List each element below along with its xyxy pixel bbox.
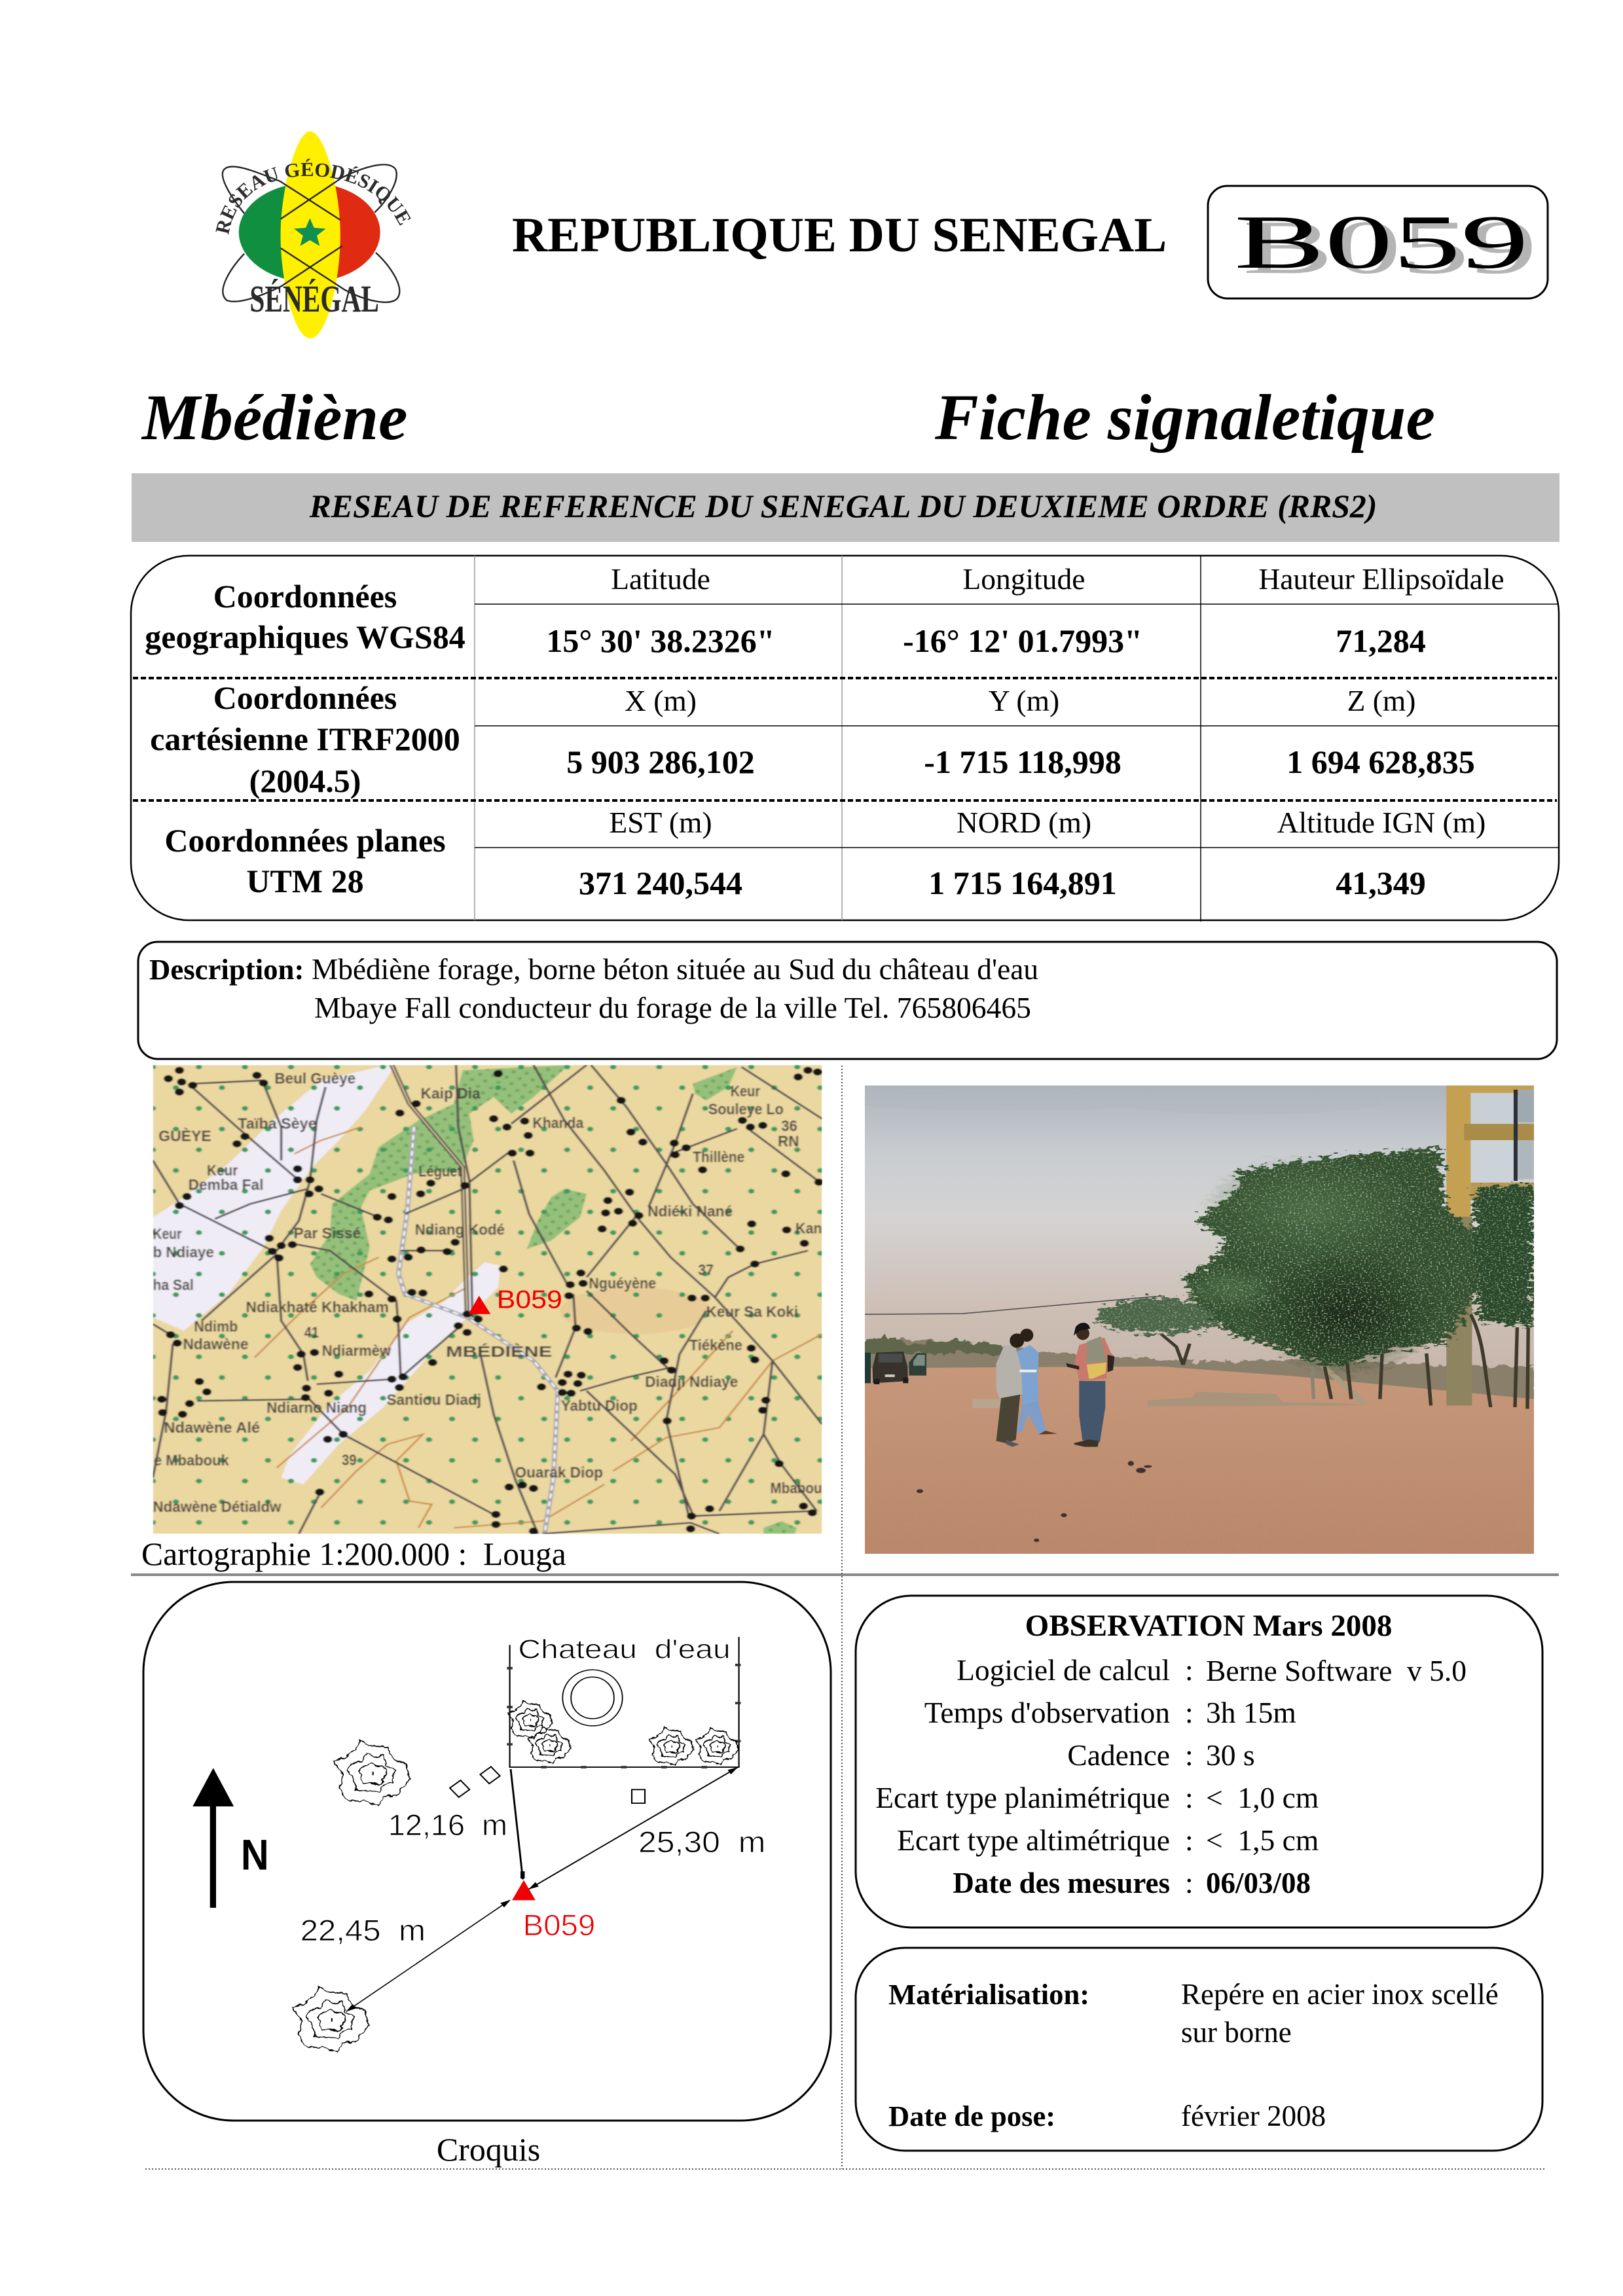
map village dots (162, 1070, 819, 1531)
logo: reseau geodesique du senegal (211, 132, 416, 338)
measurement arrowheads (346, 1767, 738, 2011)
measurement lines (346, 1767, 738, 2011)
person: orange vest (1066, 1323, 1114, 1447)
observation colons: : (1185, 1866, 1194, 1899)
water tower enclosure (507, 1635, 740, 1767)
row: geographic: Hauteur Ellipsoïdale (1258, 562, 1504, 596)
photo: site view (838, 1085, 1534, 1558)
map place names: Ndiang Kodé (415, 1221, 505, 1238)
observation labels (875, 1653, 1170, 1899)
row: geographic: geographiques WGS84 (145, 619, 465, 655)
observation values: 3h 15m (1206, 1696, 1296, 1729)
table frame (131, 556, 1559, 920)
north arrow: N (241, 1831, 269, 1879)
panel: description: Description: (149, 953, 304, 986)
map green patches (310, 1065, 797, 1534)
icon: tree enclosure 4 (696, 1727, 739, 1765)
photo people and vehicle (865, 1323, 1152, 1542)
map place names: Khanda (533, 1114, 584, 1132)
person: blue robe (1017, 1329, 1057, 1435)
row: cartesian: 1 694 628,835 (1286, 744, 1475, 780)
map contour lines (255, 1127, 822, 1528)
map place names: 37 (698, 1261, 714, 1278)
map place names: Thillène (693, 1148, 744, 1166)
row: cartesian: Y (m) (989, 684, 1059, 717)
sketch drawing (192, 1635, 765, 2053)
observation values: Berne Software v 5.0 (1206, 1654, 1467, 1687)
map place names: RN (778, 1132, 799, 1150)
panel: materialisation: Matérialisation: (888, 1978, 1089, 2011)
panel: description: Mbaye Fall conducteur du forage de la ville Tel. 765806465 (314, 991, 1031, 1024)
icon: tree enclosure 3 (649, 1727, 694, 1765)
panel: description (138, 942, 1557, 1059)
map place names: Kaip Dia (420, 1085, 481, 1102)
row: UTM: NORD (m) (957, 806, 1091, 839)
distance 12,16 m: 12,16 m (388, 1809, 507, 1842)
row: cartesian: 5 903 286,102 (566, 744, 755, 780)
stones (917, 1461, 1152, 1542)
panel: coordinates table (131, 556, 1559, 922)
panel: materialisation (856, 1948, 1542, 2151)
map place names: Mbabou (771, 1479, 822, 1497)
row: cartesian: cartésienne ITRF2000 (150, 721, 460, 757)
row: UTM: Altitude IGN (m) (1277, 806, 1486, 839)
map place names: Demba Fal (189, 1176, 264, 1193)
map place names: Ndawène Alé (164, 1419, 260, 1436)
map place names: Ndimb (194, 1318, 238, 1335)
observation labels: Cadence (1067, 1738, 1170, 1772)
badge B059: B059 (1234, 200, 1529, 285)
map place names: e Mbabouk (154, 1452, 229, 1469)
map place names: Keur Sa Koki (706, 1303, 798, 1320)
row: cartesian: (2004.5) (249, 762, 361, 799)
map place names: Kan (795, 1219, 822, 1236)
logo flag oval (239, 132, 380, 338)
photo ground (865, 1367, 1534, 1555)
panel: description: Mbédiène forage, borne béton située au Sud du château d'eau (312, 953, 1038, 986)
map place names: Ndawène (183, 1335, 249, 1352)
row: geographic: 71,284 (1336, 622, 1426, 659)
row: cartesian: Coordonnées (213, 679, 397, 716)
person: grey shirt (996, 1333, 1036, 1447)
map place names: Ndiarmèw (322, 1342, 392, 1359)
map place names: Keur (731, 1083, 760, 1100)
map place names: Tiékène (689, 1336, 742, 1354)
panel: materialisation: février 2008 (1181, 2100, 1326, 2132)
row: geographic: -16° 12' 01.7993" (903, 622, 1142, 659)
map place names: Ndiéki Nané (647, 1202, 733, 1219)
logo arc text: RESEAU GÉODÉSIQUE (215, 158, 411, 234)
map place names: Diadji Ndiaye (645, 1373, 738, 1390)
panel: materialisation: sur borne (1181, 2016, 1292, 2049)
observation heading: OBSERVATION Mars 2008 (1025, 1609, 1392, 1643)
observation colons: : (1185, 1781, 1194, 1814)
row: geographic (145, 562, 1504, 659)
sketch frame (143, 1582, 831, 2121)
map marker B059: B059 (497, 1285, 562, 1314)
icon: tree west (334, 1740, 412, 1806)
map place names: Keur (207, 1162, 238, 1179)
logo orbits (223, 165, 399, 302)
vehicle (865, 1352, 926, 1384)
map: cartographie (153, 1065, 822, 1534)
photo tree canopies (1097, 1148, 1534, 1376)
photo horizon shrubs (865, 1336, 1534, 1412)
map marker B059 (469, 1285, 562, 1314)
divider: section rule (131, 1573, 1559, 1576)
sketch caption: Croquis (437, 2131, 540, 2168)
row: cartesian: Z (m) (1347, 684, 1415, 717)
photo building (1446, 1085, 1534, 1405)
map roads (153, 1065, 822, 1534)
row: UTM (164, 806, 1486, 901)
map place names: Ndiakhaté Khakham (246, 1299, 389, 1316)
marker triangle (512, 1880, 536, 1900)
observation colons: : (1185, 1653, 1194, 1687)
map place names: Ndawène Détialdw (153, 1498, 282, 1515)
observation colons: : (1185, 1823, 1194, 1857)
map place names: GUÈYE (158, 1127, 211, 1145)
map place names: Ouarak Diop (515, 1463, 603, 1481)
row: geographic: Latitude (611, 562, 710, 596)
row: geographic: Longitude (962, 562, 1085, 596)
panel: materialisation: Repére en acier inox scellé (1181, 1978, 1499, 2011)
small square posts (450, 1767, 645, 1803)
distance 25,30 m: 25,30 m (638, 1825, 765, 1859)
north arrow (192, 1768, 269, 1908)
photo concrete curbs (1148, 1392, 1364, 1406)
map place names: Keur (153, 1225, 182, 1242)
photo scenery (838, 1085, 1534, 1555)
observation labels: Ecart type altimétrique (897, 1823, 1170, 1857)
observation labels: Ecart type planimétrique (875, 1781, 1170, 1814)
title: REPUBLIQUE DU SENEGAL (512, 208, 1167, 262)
photo trunks and fence (1161, 1314, 1528, 1408)
row: UTM: Coordonnées planes (164, 822, 446, 859)
map track (399, 1127, 558, 1534)
map place names: Yabtu Diop (561, 1397, 638, 1414)
observation labels: Temps d'observation (924, 1696, 1170, 1729)
observation colons (1185, 1653, 1194, 1899)
map place names: Santiou Diadj (386, 1391, 481, 1408)
row: geographic: Coordonnées (213, 578, 397, 615)
panel: observation (856, 1596, 1542, 1928)
photo border mask (865, 1554, 1534, 1558)
map place names: ha Sal (153, 1276, 194, 1293)
map place names: 41 (304, 1323, 319, 1341)
marker label: B059 (523, 1909, 595, 1942)
photo cloud bands (838, 1088, 1382, 1114)
row: cartesian: -1 715 118,998 (924, 744, 1122, 780)
observation values: < 1,0 cm (1206, 1781, 1319, 1814)
map place names: Taïba Sèye (238, 1115, 317, 1132)
map place names: Par Sissé (293, 1225, 361, 1242)
distance 22,45 m: 22,45 m (301, 1914, 426, 1947)
map place names (153, 1069, 822, 1515)
badge B059 (1208, 186, 1548, 298)
map place names: 39 (342, 1451, 356, 1468)
banner: reseau de reference: RESEAU DE REFERENCE DU SENEGAL DU DEUXIEME ORDRE (RRS2) (309, 488, 1377, 524)
photo wire (865, 1297, 1156, 1314)
map place names: Beul Guèye (274, 1069, 356, 1087)
map caption: Cartographie 1:200.000 : Louga (141, 1536, 566, 1572)
observation labels: Logiciel de calcul (957, 1653, 1170, 1687)
map place names: Souleye Lo (708, 1100, 784, 1118)
map sandy tint (560, 1287, 710, 1334)
row: geographic: 15° 30' 38.2326" (546, 622, 775, 659)
observation values: 30 s (1206, 1738, 1255, 1772)
map place names: Léguet (418, 1162, 462, 1180)
observation values (1206, 1654, 1467, 1899)
water tower enclosure: Chateau d'eau (518, 1635, 731, 1664)
map place names: 36 (781, 1117, 797, 1134)
icon: tree southwest (293, 1986, 371, 2053)
panel: croquis sketch (143, 1582, 831, 2121)
banner: reseau de reference (132, 473, 1559, 542)
curb (972, 1399, 1000, 1408)
map place names: Nguéyène (589, 1274, 656, 1292)
badge B059: B059 (1243, 206, 1537, 290)
row: UTM: UTM 28 (246, 863, 364, 899)
observation values: 06/03/08 (1206, 1867, 1311, 1899)
map place names: b Ndiaye (153, 1244, 214, 1261)
heading: fiche signaletique: Fiche signaletique (934, 381, 1435, 454)
row: cartesian (150, 679, 1475, 799)
row: UTM: 41,349 (1336, 865, 1426, 901)
map place names: MBÉDIÈNE (446, 1343, 552, 1360)
table grid (133, 556, 1558, 922)
map white flats (153, 1065, 500, 1484)
row: UTM: 1 715 164,891 (928, 865, 1117, 901)
observation values: < 1,5 cm (1206, 1823, 1319, 1857)
observation labels: Date des mesures (953, 1867, 1170, 1899)
icon: tree enclosure 1 (508, 1700, 553, 1739)
map vegetation dots (153, 1065, 822, 1534)
map place names: Ndiarno Niang (266, 1399, 367, 1416)
logo text senegal: SÉNÉGAL (249, 278, 379, 320)
row: UTM: EST (m) (609, 806, 712, 839)
observation colons: : (1185, 1738, 1194, 1772)
row: UTM: 371 240,544 (579, 865, 742, 901)
observation colons: : (1185, 1696, 1194, 1729)
row: cartesian: X (m) (625, 684, 697, 717)
icon: tree enclosure 2 (528, 1727, 572, 1763)
heading: site name: Mbédiène (141, 381, 407, 454)
panel: materialisation: Date de pose: (888, 2100, 1055, 2132)
page: fiche signaletique B059 (130, 131, 1559, 2170)
